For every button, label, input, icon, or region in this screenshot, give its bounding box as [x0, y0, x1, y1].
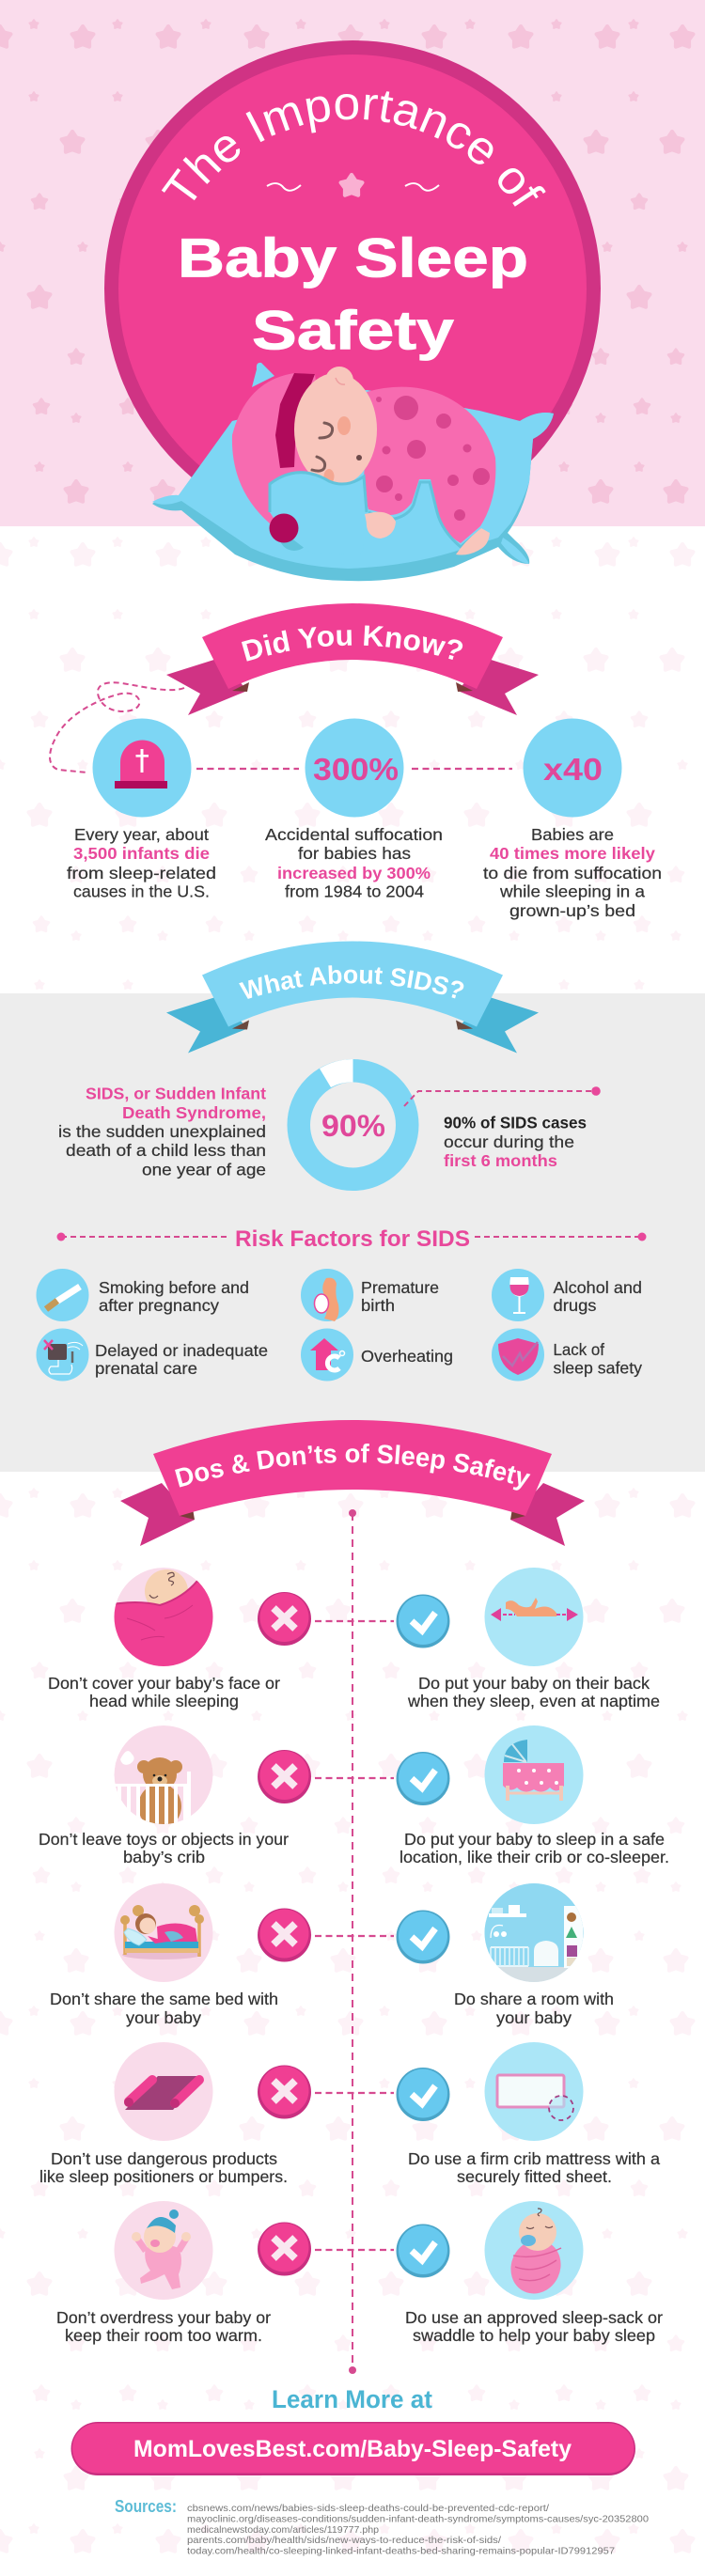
icon: wine glass: [492, 1269, 544, 1321]
icon: arrow and celsius: [301, 1329, 353, 1382]
title ornament: star and tildes: [267, 175, 439, 195]
text: accidental suffocation: for babies has: [298, 844, 411, 863]
row 3 don't: same bed: [50, 1883, 278, 2027]
text: lack of sleep safety: [553, 1340, 642, 1378]
text: 90% of SIDS cases: [444, 1113, 587, 1170]
text: don't use products: Don’t use dangerous products: [51, 2149, 277, 2168]
title: Baby Sleep: Baby Sleep: [178, 227, 528, 289]
risk factor: premature birth: [301, 1269, 439, 1321]
text: don't cover: head while sleeping: [89, 1692, 239, 1710]
text: babies are: grown-up’s bed: [509, 901, 635, 920]
row 3 don't badge: [258, 1908, 311, 1962]
risk factor: overheating: [301, 1329, 453, 1382]
text: alcohol: [553, 1278, 642, 1315]
illustration: sleeping baby on pillow: [152, 363, 554, 581]
decorative dashed squiggle arrow: [50, 682, 184, 773]
text: SIDS definition: Death Syndrome,: [122, 1103, 266, 1122]
text: don't overdress: Don’t overdress your baby or: [56, 2308, 271, 2327]
text: accidental suffocation: [265, 825, 443, 900]
icon: broken shield: [492, 1329, 544, 1382]
text: every year: Every year, about: [74, 825, 209, 844]
text: don't overdress: [56, 2308, 271, 2345]
heading: Risk Factors for SIDS: [56, 1226, 647, 1252]
text: 90% of SIDS cases: first 6 months: [444, 1151, 557, 1170]
text: SIDS definition: one year of age: [142, 1160, 266, 1179]
text: do share room: Do share a room with: [454, 1990, 614, 2008]
title: Safety: Safety: [252, 301, 454, 361]
text: accidental suffocation: increased by 300%: [277, 864, 431, 882]
row 3 do: share a room: [454, 1883, 614, 2027]
text: don't leave toys: baby’s crib: [123, 1848, 205, 1866]
row 2 don't badge: [258, 1750, 311, 1803]
text: do put safe: Do put your baby to sleep in a safe: [404, 1830, 665, 1849]
text: do use sleep-sack: [405, 2308, 663, 2345]
ribbon: Did You Know?: [166, 603, 539, 715]
ribbon: Did You Know?: Did You Know?: [242, 626, 462, 662]
text: 90% of SIDS cases: occur during the: [444, 1132, 574, 1151]
illustration: baby on back with arrows: [485, 1568, 583, 1666]
illustration: bassinet: [485, 1725, 583, 1824]
text: do share room: your baby: [496, 2008, 572, 2027]
row 1 don't badge: [258, 1592, 311, 1646]
text: do put safe: [400, 1830, 669, 1866]
illustration: teddy bear in crib: [113, 1725, 212, 1829]
illustration: baby under blanket: [115, 1568, 212, 1666]
row 3 do badge: [397, 1910, 449, 1964]
stat: 300%: [265, 718, 443, 900]
text: overheating: Overheating: [361, 1347, 453, 1366]
icon: x40 circle: [523, 718, 622, 818]
title badge circle: [104, 40, 601, 537]
text: don't leave toys: Don’t leave toys or objects in your: [39, 1830, 289, 1849]
sources: cbsnews.com/news/babies-sids-sleep-deaths-could-be-prevented-cdc-report/: [187, 2503, 549, 2514]
row 5 do: swaddle: [405, 2201, 663, 2345]
row 5 don't badge: [258, 2222, 311, 2276]
connector dashes: [196, 768, 512, 770]
button: MomLovesBest URL: [71, 2422, 635, 2475]
text: don't cover: [48, 1674, 280, 1710]
heading: Learn More at: Learn More at: [272, 2385, 432, 2413]
icon: tombstone: [92, 718, 192, 818]
text: don't share bed: your baby: [126, 2008, 201, 2027]
text: don't overdress: keep their room too warm.: [65, 2326, 262, 2345]
illustration: swaddled baby: [485, 2201, 583, 2302]
text: do share room: [454, 1990, 614, 2027]
button: MomLovesBest URL: MomLovesBest.com/Baby-Sleep-Safety: [133, 2436, 572, 2462]
text: do use firm: securely fitted sheet.: [457, 2167, 612, 2186]
stat: 3,500 infants: [67, 718, 216, 900]
text: smoking: [99, 1278, 249, 1315]
text: accidental suffocation: Accidental suffocation: [265, 825, 443, 844]
text: SIDS definition: death of a child less than: [66, 1141, 266, 1160]
row 2 do badge: [397, 1752, 449, 1805]
text: SIDS definition: SIDS, or Sudden Infant: [86, 1085, 266, 1103]
heading: Risk Factors for SIDS: Risk Factors for SIDS: [235, 1226, 470, 1252]
chart: 90% donut: 90%: [321, 1109, 385, 1143]
text: babies are: Babies are: [531, 825, 614, 844]
text: don't cover: Don’t cover your baby’s face or: [48, 1674, 280, 1693]
sources: [115, 2497, 649, 2556]
text: don't use products: [39, 2149, 288, 2186]
text: do use sleep-sack: swaddle to help your baby sleep: [413, 2326, 655, 2345]
row 2 don't: toys in crib: [39, 1725, 289, 1866]
illustration: overdressed baby: [115, 2201, 212, 2300]
row 4 do badge: [397, 2068, 449, 2121]
text: SIDS definition: [58, 1085, 266, 1179]
text: don't share bed: Don’t share the same bed with: [50, 1990, 278, 2008]
sources: mayoclinic.org/diseases-conditions/sudden-infant-death-syndrome/symptoms-causes/syc-20352800: [187, 2513, 649, 2524]
stat: x40: [483, 718, 662, 920]
text: do put back: when they sleep, even at naptime: [407, 1692, 660, 1710]
text: do put safe: location, like their crib or co-sleeper.: [400, 1848, 669, 1866]
text: lack of sleep safety: sleep safety: [553, 1359, 642, 1378]
text: smoking: Smoking before and: [99, 1278, 249, 1297]
text: do use sleep-sack: Do use an approved sleep-sack or: [405, 2308, 663, 2327]
row 4 do: firm mattress: [408, 2042, 660, 2186]
panel: lower background: [0, 993, 705, 2576]
text: babies are: while sleeping in a: [499, 882, 645, 900]
text: don't leave toys: [39, 1830, 289, 1866]
text: alcohol: drugs: [553, 1296, 597, 1315]
ribbon: What About SIDS?: [166, 942, 539, 1053]
text: do put back: Do put your baby on their back: [418, 1674, 650, 1693]
illustration: mattress with fitted sheet: [485, 2042, 583, 2141]
illustration: mother and baby in bed: [115, 1883, 212, 1982]
text: do use firm: [408, 2149, 660, 2186]
row 5 don't: overdress: [56, 2201, 271, 2345]
text: smoking: after pregnancy: [99, 1296, 219, 1315]
text: SIDS definition: is the sudden unexplained: [58, 1122, 266, 1141]
text: delayed care: Delayed or inadequate: [95, 1341, 268, 1360]
icon: 300% circle: [305, 718, 404, 818]
central dashed timeline: [315, 1509, 394, 2374]
row 2 do: safe location: [400, 1725, 669, 1866]
sources: parents.com/baby/health/sids/new-ways-to-reduce-the-risk-of-sids/: [187, 2535, 501, 2546]
icon: womb: [301, 1269, 353, 1321]
illustration: nursery room: [485, 1883, 583, 1982]
text: don't use products: like sleep positioners or bumpers.: [39, 2167, 288, 2186]
text: premature: [361, 1278, 439, 1315]
icon: cigarette: [36, 1269, 88, 1321]
text: 90% of SIDS cases: 90% of SIDS cases: [444, 1113, 587, 1132]
text: lack of sleep safety: Lack of: [553, 1340, 604, 1359]
sources: Sources:: [115, 2497, 177, 2516]
text: alcohol: Alcohol and: [553, 1278, 642, 1297]
row 5 do badge: [397, 2224, 449, 2278]
text: delayed care: prenatal care: [95, 1359, 197, 1378]
risk factor: sleep safety: [492, 1329, 642, 1382]
row 1 do: on their back: [407, 1568, 660, 1710]
row 1 don't: face cover: [48, 1568, 280, 1710]
text: babies are: [483, 825, 662, 920]
ribbon: What About SIDS?: What About SIDS?: [239, 965, 464, 999]
text: premature: birth: [361, 1296, 395, 1315]
text: do use firm: Do use a firm crib mattress with a: [408, 2149, 660, 2168]
row 4 don't badge: [258, 2066, 311, 2118]
text: accidental suffocation: from 1984 to 2004: [285, 882, 424, 900]
sources: medicalnewstoday.com/articles/119777.php: [187, 2524, 379, 2536]
risk factor: prenatal care: [36, 1329, 268, 1382]
illustration: sleep positioner: [115, 2042, 212, 2141]
risk factor: alcohol: [492, 1269, 642, 1321]
icon: ultrasound monitor: [36, 1329, 88, 1382]
sources: today.com/health/co-sleeping-linked-infant-deaths-bed-sharing-remains-popular-ID79912957: [187, 2545, 615, 2556]
ribbon: Dos & Don'ts: [120, 1420, 585, 1546]
ribbon: Dos & Don'ts: Dos & Don’ts of Sleep Safety: [175, 1444, 530, 1491]
text: don't share bed: [50, 1990, 278, 2027]
text: delayed care: [95, 1341, 268, 1378]
row 4 don't: sleep positioners: [39, 2042, 288, 2186]
icon: x40 circle: x40: [543, 752, 603, 787]
icon: 300% circle: 300%: [313, 752, 399, 787]
risk factor: smoking: [36, 1269, 249, 1321]
text: do put back: [407, 1674, 660, 1710]
text: babies are: 40 times more likely: [490, 844, 655, 863]
callout leader line: [404, 1086, 601, 1106]
text: babies are: to die from suffocation: [483, 864, 662, 882]
text: every year: [67, 825, 216, 900]
text: every year: from sleep-related: [67, 864, 216, 882]
text: every year: 3,500 infants die: [73, 844, 210, 863]
row 1 do badge: [397, 1594, 449, 1648]
text: premature: Premature: [361, 1278, 439, 1297]
chart: 90% donut: [299, 1059, 407, 1179]
panel: header background: [0, 0, 705, 993]
title: The Importance of: The Importance of: [162, 91, 545, 207]
text: every year: causes in the U.S.: [73, 882, 210, 900]
